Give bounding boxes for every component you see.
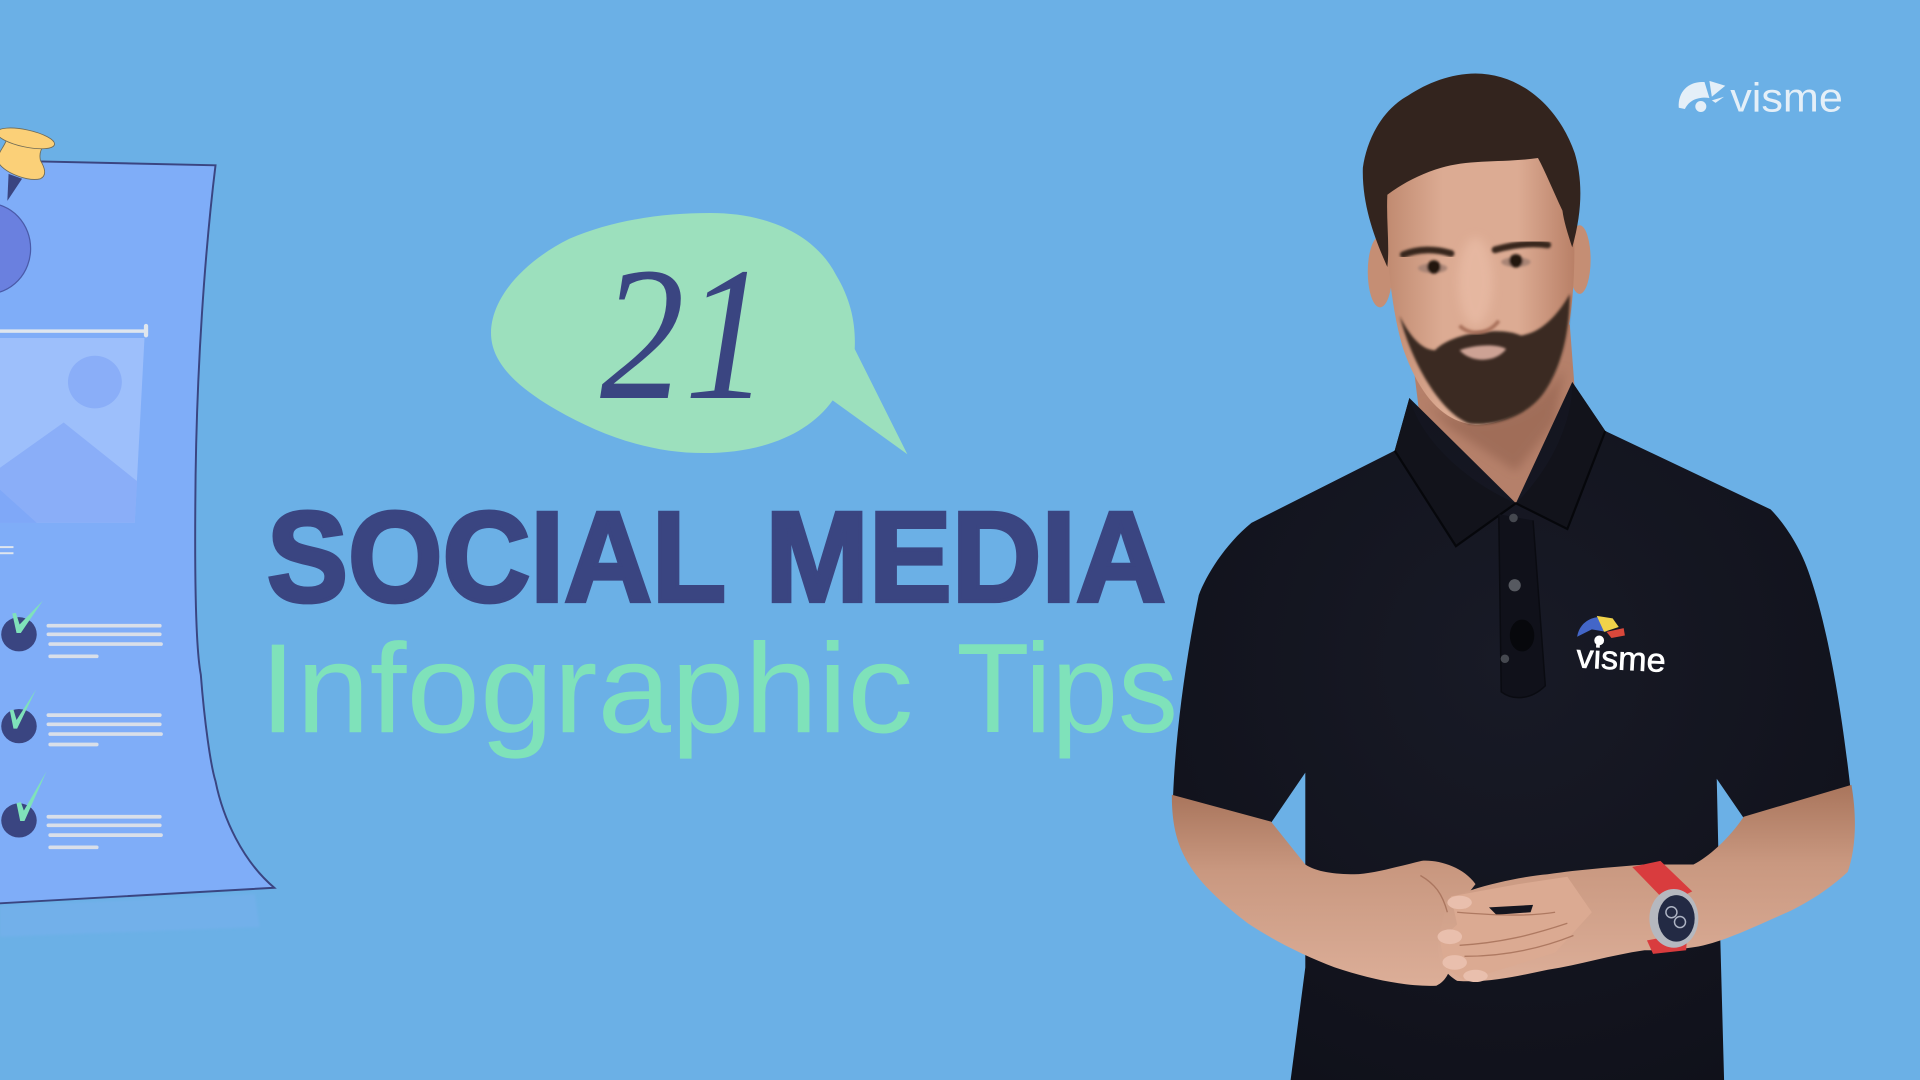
pie circle [0, 203, 31, 294]
image placeholder [0, 324, 148, 523]
checklist item 3 [1, 771, 163, 849]
ears [1368, 225, 1591, 307]
clasped hands [1420, 876, 1592, 982]
hair [1363, 73, 1580, 267]
beard [1400, 294, 1570, 424]
subtitle: infographic tips [260, 617, 1178, 759]
title: social media: MEDIA [765, 486, 1166, 629]
shirt placket, buttons and microphone [1499, 514, 1545, 698]
right arm [1438, 785, 1855, 981]
paper sheet [0, 160, 274, 904]
neck [1411, 324, 1575, 504]
shirt logo [1575, 616, 1667, 680]
subtitle: infographic tips: Tips [956, 617, 1178, 759]
presenter [1172, 73, 1855, 1080]
shirt [1173, 382, 1850, 1080]
checklist item 1 [1, 601, 163, 658]
left arm [1172, 795, 1476, 986]
title: social media: SOCIAL [267, 486, 726, 629]
logo mark [1679, 81, 1725, 112]
subtitle: infographic tips: Infographic [260, 617, 913, 759]
face [1386, 140, 1574, 425]
number 21: 21 [600, 229, 769, 440]
checklist item 2 [1, 689, 163, 746]
eyes [1418, 254, 1531, 274]
visme logo [1679, 74, 1843, 120]
shirt logo wordmark: visme [1575, 638, 1667, 680]
logo wordmark: visme [1730, 74, 1843, 120]
watch [1632, 861, 1698, 954]
illustration: pinned document [0, 124, 274, 937]
neck shadow [1420, 367, 1565, 471]
collar [1395, 382, 1605, 546]
speech bubble with number [491, 213, 907, 454]
paper shadow [0, 894, 260, 937]
short caption lines [0, 546, 13, 554]
mouth [1460, 345, 1506, 360]
eyebrows [1403, 244, 1548, 255]
nose shadow [1460, 321, 1499, 333]
title: social media [267, 486, 1166, 629]
icon: push pin [0, 124, 56, 201]
nose highlight [1458, 238, 1493, 326]
head [1363, 73, 1591, 425]
